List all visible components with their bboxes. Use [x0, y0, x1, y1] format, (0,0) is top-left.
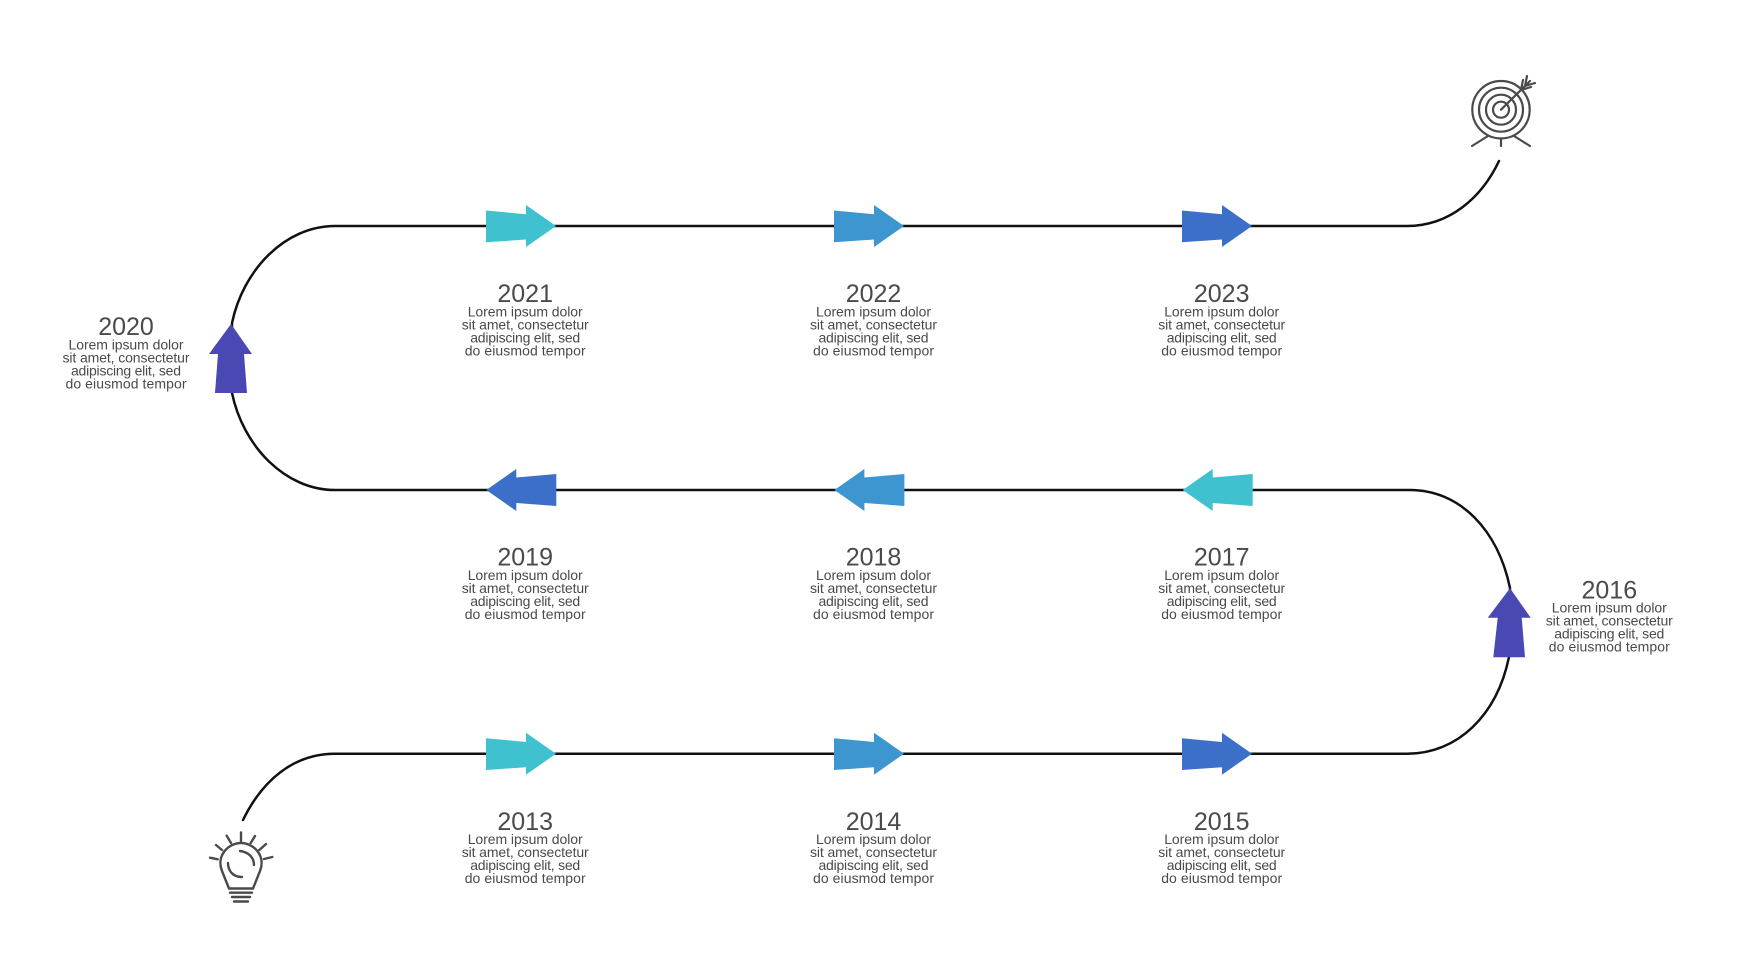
label 2021 [462, 280, 589, 358]
step 2014 [810, 733, 937, 886]
label 2020: adipiscing elit, sed [71, 362, 181, 378]
label 2020: 2020 [98, 313, 154, 341]
label 2022: Lorem ipsum dolor [816, 304, 931, 320]
label 2023: 2023 [1194, 280, 1250, 308]
step 2017 [1158, 469, 1286, 622]
label 2018: 2018 [846, 544, 901, 572]
step 2020 [62, 313, 252, 393]
label 2017: 2017 [1194, 544, 1250, 572]
label 2013: do eiusmod tempor [465, 870, 586, 886]
label 2019: Lorem ipsum dolor [468, 567, 583, 583]
step 2019 [462, 469, 589, 622]
label 2019: adipiscing elit, sed [470, 593, 580, 609]
step 2015 [1158, 733, 1286, 886]
arrow 2015 [1182, 733, 1252, 775]
label 2023: sit amet, consectetur [1158, 316, 1286, 332]
label 2017: adipiscing elit, sed [1167, 593, 1277, 609]
label 2015 [1158, 808, 1286, 886]
label 2016 [1546, 576, 1673, 655]
label 2018: sit amet, consectetur [810, 580, 937, 596]
label 2021: adipiscing elit, sed [470, 330, 580, 346]
step 2022 [810, 205, 937, 358]
label 2013: Lorem ipsum dolor [468, 831, 583, 847]
arrow 2016 [1488, 588, 1531, 657]
label 2014: Lorem ipsum dolor [816, 831, 931, 847]
label 2017 [1158, 544, 1286, 622]
label 2018: do eiusmod tempor [813, 606, 934, 622]
icon: target with arrow [1472, 76, 1535, 146]
label 2016: sit amet, consectetur [1546, 612, 1673, 628]
step 2023 [1158, 205, 1286, 358]
label 2014: do eiusmod tempor [813, 870, 934, 886]
label 2022: adipiscing elit, sed [818, 330, 928, 346]
label 2013: adipiscing elit, sed [470, 857, 580, 873]
arrow 2018 [834, 469, 904, 511]
arrow 2013 [486, 733, 556, 775]
label 2022: do eiusmod tempor [813, 342, 934, 358]
label 2015: sit amet, consectetur [1158, 844, 1286, 860]
label 2016: Lorem ipsum dolor [1552, 599, 1667, 615]
label 2014: sit amet, consectetur [810, 844, 937, 860]
arrow 2020 [209, 324, 252, 393]
label 2015: do eiusmod tempor [1161, 870, 1283, 886]
step 2016 [1488, 576, 1673, 657]
label 2017: Lorem ipsum dolor [1164, 567, 1280, 583]
label 2021: Lorem ipsum dolor [468, 304, 583, 320]
label 2023: Lorem ipsum dolor [1164, 304, 1280, 320]
label 2013: 2013 [497, 808, 553, 836]
winding timeline path [232, 161, 1510, 820]
label 2020: sit amet, consectetur [62, 350, 190, 366]
label 2017: do eiusmod tempor [1161, 606, 1283, 622]
label 2019: sit amet, consectetur [462, 580, 589, 596]
label 2021: sit amet, consectetur [462, 316, 589, 332]
arrow 2017 [1183, 469, 1253, 511]
label 2022: 2022 [846, 280, 901, 308]
label 2015: Lorem ipsum dolor [1164, 831, 1280, 847]
label 2020 [62, 313, 190, 392]
label 2016: adipiscing elit, sed [1554, 626, 1664, 642]
label 2014: 2014 [846, 808, 901, 836]
step 2018 [810, 469, 937, 622]
label 2018: adipiscing elit, sed [818, 593, 928, 609]
label 2018: Lorem ipsum dolor [816, 567, 931, 583]
label 2021: 2021 [497, 280, 553, 308]
label 2015: adipiscing elit, sed [1167, 857, 1277, 873]
label 2015: 2015 [1194, 808, 1250, 836]
label 2014 [810, 808, 937, 886]
label 2020: Lorem ipsum dolor [68, 336, 184, 352]
label 2023 [1158, 280, 1286, 358]
arrow 2021 [486, 205, 556, 247]
label 2021: do eiusmod tempor [465, 342, 586, 358]
step 2013 [462, 733, 589, 886]
label 2016: 2016 [1581, 576, 1637, 604]
label 2023: do eiusmod tempor [1161, 342, 1283, 358]
label 2014: adipiscing elit, sed [818, 857, 928, 873]
label 2023: adipiscing elit, sed [1167, 330, 1277, 346]
label 2018 [810, 544, 937, 622]
step 2021 [462, 205, 589, 358]
label 2017: sit amet, consectetur [1158, 580, 1286, 596]
arrow 2014 [834, 733, 904, 775]
arrow 2022 [834, 205, 904, 247]
label 2020: do eiusmod tempor [66, 376, 187, 392]
arrow 2019 [486, 469, 556, 511]
arrow 2023 [1182, 205, 1252, 247]
label 2019: do eiusmod tempor [465, 606, 586, 622]
label 2022: sit amet, consectetur [810, 316, 937, 332]
label 2013: sit amet, consectetur [462, 844, 589, 860]
label 2013 [462, 808, 589, 886]
label 2022 [810, 280, 937, 358]
label 2019 [462, 544, 589, 622]
label 2019: 2019 [497, 544, 553, 572]
label 2016: do eiusmod tempor [1549, 639, 1670, 655]
icon: light bulb [210, 832, 272, 902]
